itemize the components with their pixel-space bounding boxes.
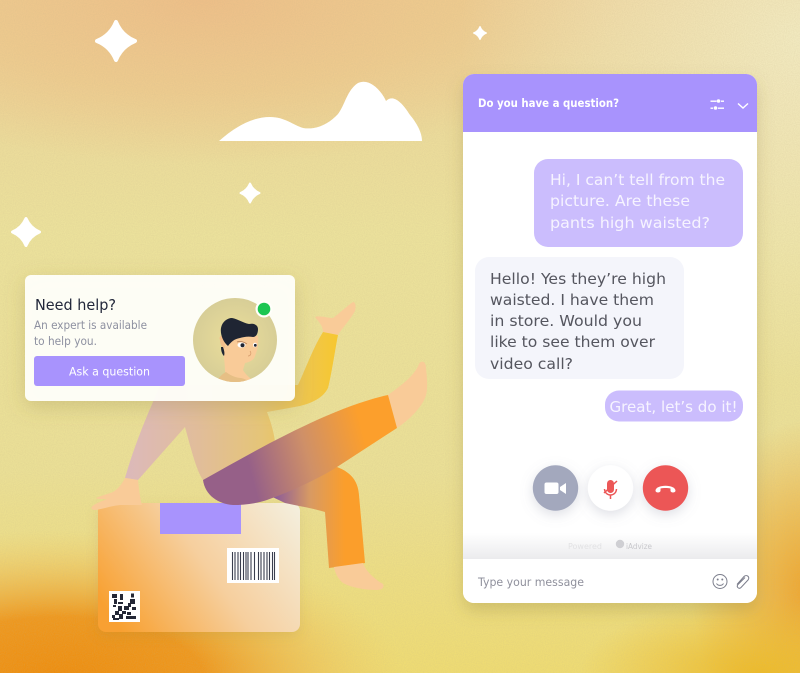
barcode — [227, 548, 279, 583]
raised foot — [388, 362, 427, 428]
chat header — [463, 74, 757, 132]
button: hang up — [643, 465, 688, 511]
button: ask a question — [34, 356, 185, 386]
header title: Do you have a question? — [478, 96, 619, 110]
footer fade and powered by: Powered — [568, 542, 602, 551]
user message 2 — [605, 390, 743, 422]
chat panel — [463, 74, 757, 603]
agent message: in store. Would you — [490, 312, 642, 330]
user message 1 — [534, 159, 743, 247]
icon: large sparkle — [97, 22, 135, 60]
QR code — [109, 591, 140, 622]
icon: small sparkle top — [474, 27, 486, 39]
card description: to help you. — [34, 334, 97, 348]
button: ask a question: Ask a question — [69, 364, 150, 378]
eyes — [238, 342, 246, 348]
online status dot — [256, 300, 272, 318]
icon: medium sparkle — [240, 184, 260, 202]
parcel box — [98, 503, 300, 632]
lower leg — [262, 467, 365, 568]
footer fade and powered by: iAdvize — [626, 542, 652, 551]
illustration: person sitting on parcel — [125, 302, 427, 590]
agent message: video call? — [490, 355, 573, 373]
user message 1: pants high waisted? — [550, 214, 710, 232]
card description — [34, 318, 147, 348]
icon: left sparkle — [12, 218, 40, 246]
agent message: Hello! Yes they’re high — [490, 270, 666, 288]
icon: chevron — [738, 104, 748, 108]
card heading: Need help? — [35, 296, 116, 314]
card description: An expert is available — [34, 318, 147, 332]
icon: paperclip — [737, 576, 749, 588]
agent message: like to see them over — [490, 333, 656, 351]
message input — [463, 574, 757, 603]
sleeve and torso — [125, 332, 338, 480]
footer fade and powered by — [463, 540, 757, 559]
avatar — [193, 298, 277, 384]
call controls — [533, 465, 688, 511]
user message 1: Hi, I can’t tell from the — [550, 171, 725, 189]
card: need help — [25, 275, 295, 401]
shirt — [218, 372, 248, 382]
raised leg — [203, 395, 397, 505]
button: mute microphone — [588, 465, 633, 511]
icon: settings sliders — [710, 99, 724, 110]
lower hand on box — [91, 478, 142, 510]
ear — [220, 336, 225, 348]
user message 2: Great, let’s do it! — [610, 398, 738, 416]
agent message: waisted. I have them — [490, 291, 654, 309]
button: video — [533, 465, 578, 511]
lower foot — [334, 563, 384, 590]
user message 1: picture. Are these — [550, 192, 690, 210]
cloud — [219, 82, 422, 141]
hair — [221, 318, 258, 346]
parcel tape — [160, 503, 241, 534]
neck and face — [223, 335, 258, 384]
agent message — [475, 257, 684, 379]
raised hand — [315, 302, 356, 335]
message input: Type your message — [477, 575, 584, 589]
icon: emoji — [713, 574, 727, 588]
